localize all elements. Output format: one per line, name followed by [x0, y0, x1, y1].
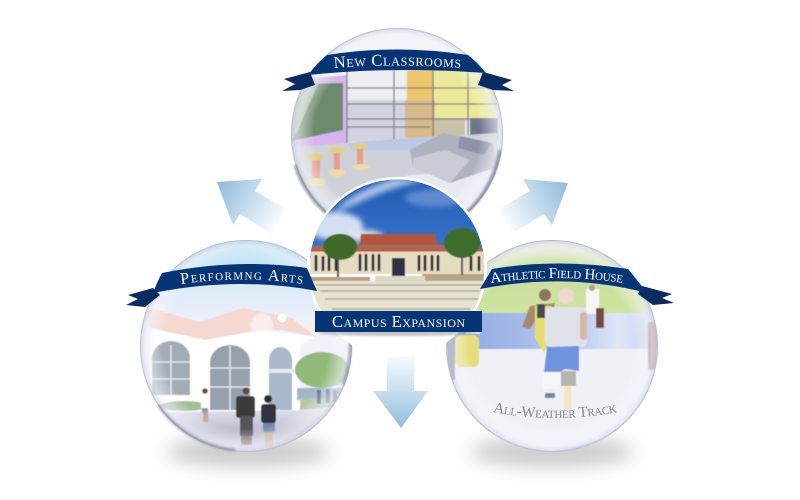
arrow: up-right — [499, 179, 568, 234]
shadow: left sphere — [166, 437, 330, 467]
banner: new classrooms: New Classrooms — [334, 54, 460, 68]
arrow: up-left — [217, 179, 286, 234]
sphere: performing arts — [140, 240, 355, 460]
rim: lower shading — [295, 150, 500, 220]
banner: performing arts: Performng Arts — [180, 270, 302, 284]
arrow: down — [373, 350, 428, 428]
sphere: new classrooms — [291, 28, 503, 214]
banner: new classrooms — [282, 50, 514, 91]
banner: athletic field house — [480, 264, 674, 305]
banner: campus expansion: Campus Expansion — [332, 312, 465, 331]
label: all-weather track: All-Weather Track — [493, 403, 617, 418]
banner: athletic field house: Athletic Field House — [491, 268, 622, 283]
sphere: athletic field house — [446, 240, 658, 452]
banner: performing arts — [126, 264, 317, 307]
highlights — [250, 314, 286, 336]
rim: lower shading — [158, 325, 350, 450]
shadow: right sphere — [470, 437, 634, 467]
banner: campus expansion — [315, 311, 482, 336]
center photo: campus building — [307, 177, 488, 357]
